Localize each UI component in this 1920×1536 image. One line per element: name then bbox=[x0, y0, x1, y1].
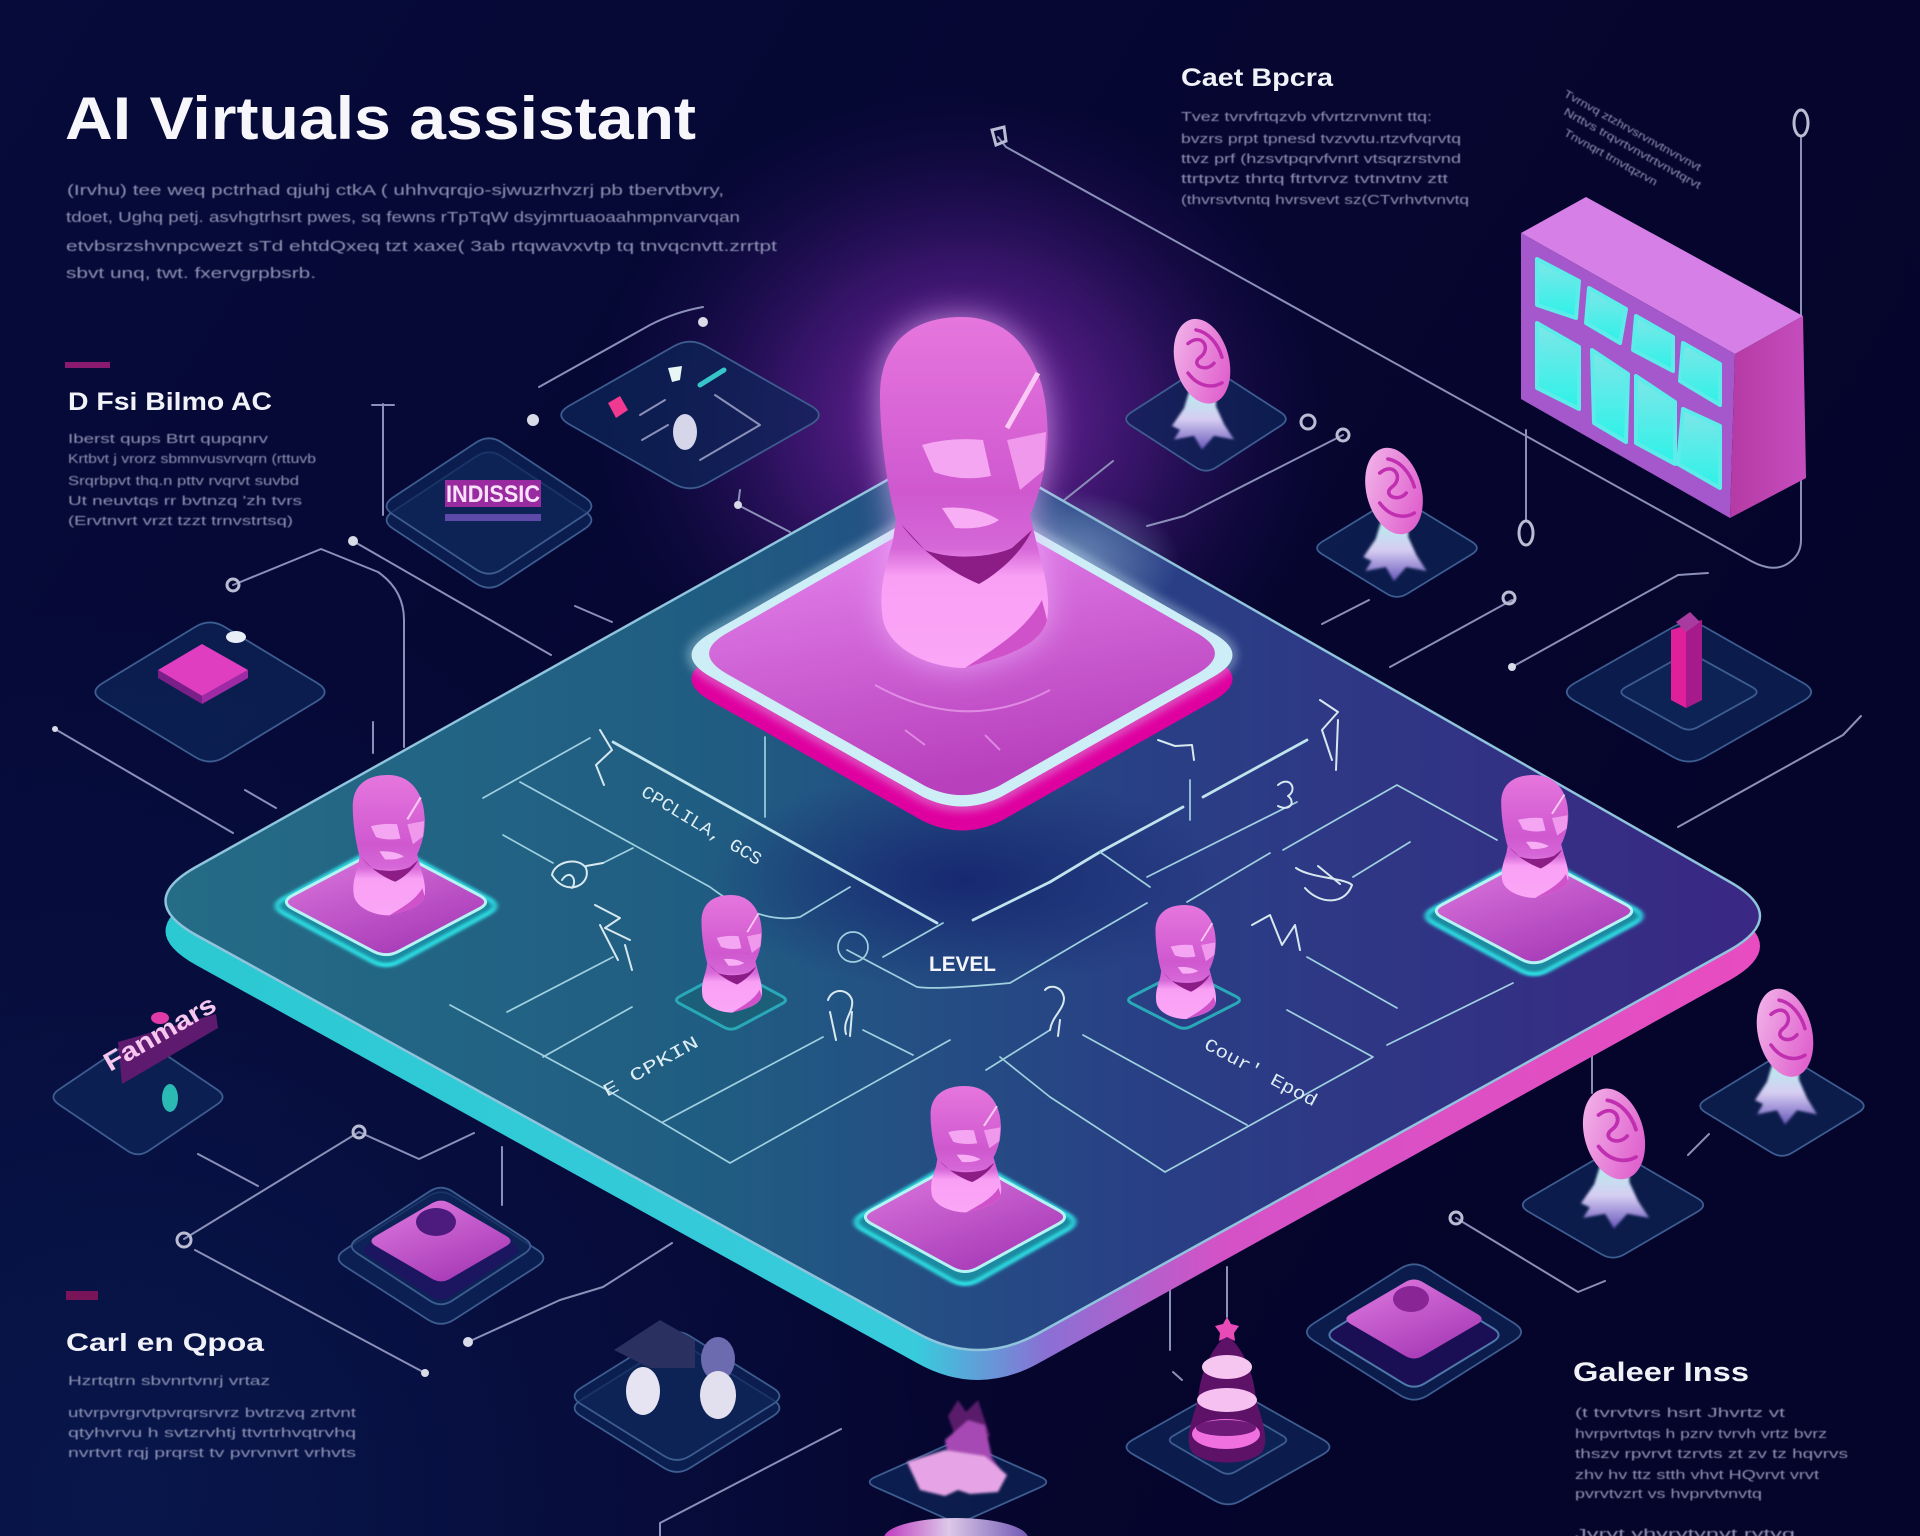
text block: top centre: Caet Bpcra bbox=[1181, 64, 1334, 92]
node: tower tile bbox=[1126, 1317, 1330, 1504]
box top bbox=[1521, 197, 1803, 354]
text block: top centre: ttrtpvtz thrtq ftrtvrvz tvtnvtnv ztt bbox=[1181, 171, 1449, 186]
central pad rim bbox=[692, 501, 1232, 806]
central pad with main head bbox=[692, 317, 1232, 830]
text block: bottom left: Hzrtqtrn sbvnrtvnrj vrtaz bbox=[68, 1373, 270, 1388]
text block: left upper: Ut neuvtqs rr bvtnzq 'zh tvrs bbox=[68, 493, 303, 508]
node: swirl top 1 bbox=[1126, 313, 1286, 471]
platform bbox=[166, 453, 1760, 1380]
node: pink diamond tile right bbox=[1307, 1264, 1521, 1400]
node: text badge tile bbox=[387, 438, 591, 588]
node: spheres tile bbox=[575, 1320, 779, 1472]
text block: bottom right: zhv hv ttz stth vhvt HQvrvt vrvt bbox=[1575, 1467, 1820, 1482]
small pad right with head bbox=[1427, 775, 1641, 974]
intro paragraph bbox=[66, 182, 778, 282]
text block: top centre: Tvez tvrvfrtqzvb vfvrtzrvnvnt ttq: bbox=[1181, 109, 1432, 124]
slanted note: Nrttvs trqvrtvnvtrtvnvtqrvt bbox=[1562, 106, 1703, 192]
text block: bottom right: (t tvrvtvrs hsrt Jhvrtz vt bbox=[1575, 1405, 1786, 1420]
board sketches bbox=[552, 700, 1352, 1040]
central pad glow bbox=[692, 501, 1232, 806]
node: right tower tile bbox=[1567, 612, 1811, 762]
platform edge bbox=[166, 483, 1760, 1380]
node: sign tile: Fanmars bbox=[98, 989, 221, 1077]
text block: bottom right: thszv rpvrvt tzrvts zt zv tz hqvrvs bbox=[1575, 1446, 1849, 1461]
box front bbox=[1521, 233, 1735, 518]
board text labels: LEVEL bbox=[929, 953, 996, 976]
text block: bottom left: qtyhvrvu h svtzrvhtj ttvrtrhvqtrvhq bbox=[68, 1425, 356, 1440]
node: bottom centre tile bbox=[870, 1400, 1046, 1536]
slanted note bbox=[1562, 88, 1703, 192]
circuit lines bbox=[450, 737, 1513, 1172]
small pad bottom with head bbox=[856, 1086, 1074, 1284]
node: swirl right bbox=[1700, 983, 1864, 1156]
text block: bottom right: Galeer Inss bbox=[1573, 1357, 1749, 1387]
text block: bottom right bbox=[1573, 1357, 1849, 1536]
text block: bottom left: utvrpvrgrvtpvrqrsrvrz bvtrzvq zrtvnt bbox=[68, 1405, 357, 1420]
main head glow bbox=[880, 317, 1048, 668]
intro paragraph: tdoet, Ughq petj. asvhgtrhsrt pwes, sq fewns rTpTqW dsyjmrtuaoaahmpnvarvqan bbox=[66, 209, 740, 226]
text block: top centre bbox=[1181, 64, 1469, 207]
platform surface bbox=[166, 453, 1760, 1350]
intro paragraph: (Irvhu) tee weq pctrhad qjuhj ctkA ( uhhvqrqjo-sjwuzrhvzrj pb tbervtbvry, bbox=[67, 182, 724, 199]
small pad left with head bbox=[277, 775, 495, 965]
title: AI Virtuals assistant bbox=[65, 85, 696, 152]
board text labels: CPCLILA, GCS bbox=[637, 783, 765, 871]
inner head right bbox=[1129, 905, 1239, 1028]
text block: bottom right: pvrvtvzrt vs hvprvtvnvtq bbox=[1575, 1486, 1762, 1501]
box windows bbox=[1537, 259, 1720, 488]
node: text badge tile: INDISSIC bbox=[446, 481, 540, 508]
text block: top centre: (thvrsvtvntq hvrsvevt sz(CTvrhvtvnvtq bbox=[1181, 192, 1469, 207]
inner head left bbox=[676, 895, 786, 1029]
main head bbox=[880, 317, 1048, 668]
central pad side bbox=[692, 525, 1232, 830]
slanted note: Tvrnvq ztzhrvsrvnvtnvrvnvt bbox=[1562, 88, 1703, 174]
board text labels: Cour' Epod bbox=[1200, 1036, 1320, 1112]
text block: left upper: (Ervtnvrt vrzt tzzt trnvstrtsq) bbox=[68, 513, 293, 528]
text block: bottom right: hvrpvrtvtqs h pzrv tvrvh vrtz bvrz bbox=[1575, 1426, 1827, 1441]
node: pink diamond tile left bbox=[339, 1188, 543, 1324]
text block: left upper bbox=[65, 362, 316, 528]
board text labels: E CPKIN bbox=[600, 1033, 703, 1102]
slanted note: Tnvnqrt trnvtqzrvn bbox=[1562, 127, 1659, 189]
box side bbox=[1730, 316, 1806, 518]
intro paragraph: etvbsrzshvnpcwezt sTd ehtdQxeq tzt xaxe( 3ab rtqwavxvtp tq tnvqcnvtt.zrrtpt bbox=[66, 238, 778, 255]
text block: left upper: Srqrbpvt thq.n pttv rvqrvt suvbd bbox=[68, 473, 299, 488]
text block: left upper: D Fsi Bilmo AC bbox=[68, 388, 272, 416]
text block: bottom left bbox=[66, 1291, 357, 1460]
text block: left upper: Iberst qups Btrt qupqnrv bbox=[68, 431, 269, 446]
intro paragraph: sbvt unq, twt. fxervgrpbsrb. bbox=[66, 265, 316, 282]
node: left pink square tile bbox=[95, 622, 325, 762]
text block: bottom left: Carl en Qpoa bbox=[66, 1329, 265, 1357]
side panel: pink window box bbox=[1521, 197, 1806, 518]
node: top left tile bbox=[561, 342, 819, 488]
node: swirl lower bbox=[1523, 1082, 1703, 1258]
board text labels bbox=[600, 783, 1320, 1112]
text block: left upper: Krtbvt j vrorz sbmnvusvrvqrn (rttuvb bbox=[68, 451, 316, 466]
text block: top centre: ttvz prf (hzsvtpqrvfvnrt vtsqrzrstvnd bbox=[1181, 151, 1461, 166]
node: swirl top 2 bbox=[1317, 442, 1477, 597]
text block: bottom left: nvrtvrt rqj prqrst tv pvrvnvrt vrhvts bbox=[68, 1445, 357, 1460]
node: sign tile bbox=[53, 989, 223, 1154]
central pad top bbox=[709, 510, 1215, 795]
text block: top centre: bvzrs prpt tpnesd tvzvvtu.rtzvfvqrvtq bbox=[1181, 131, 1461, 146]
